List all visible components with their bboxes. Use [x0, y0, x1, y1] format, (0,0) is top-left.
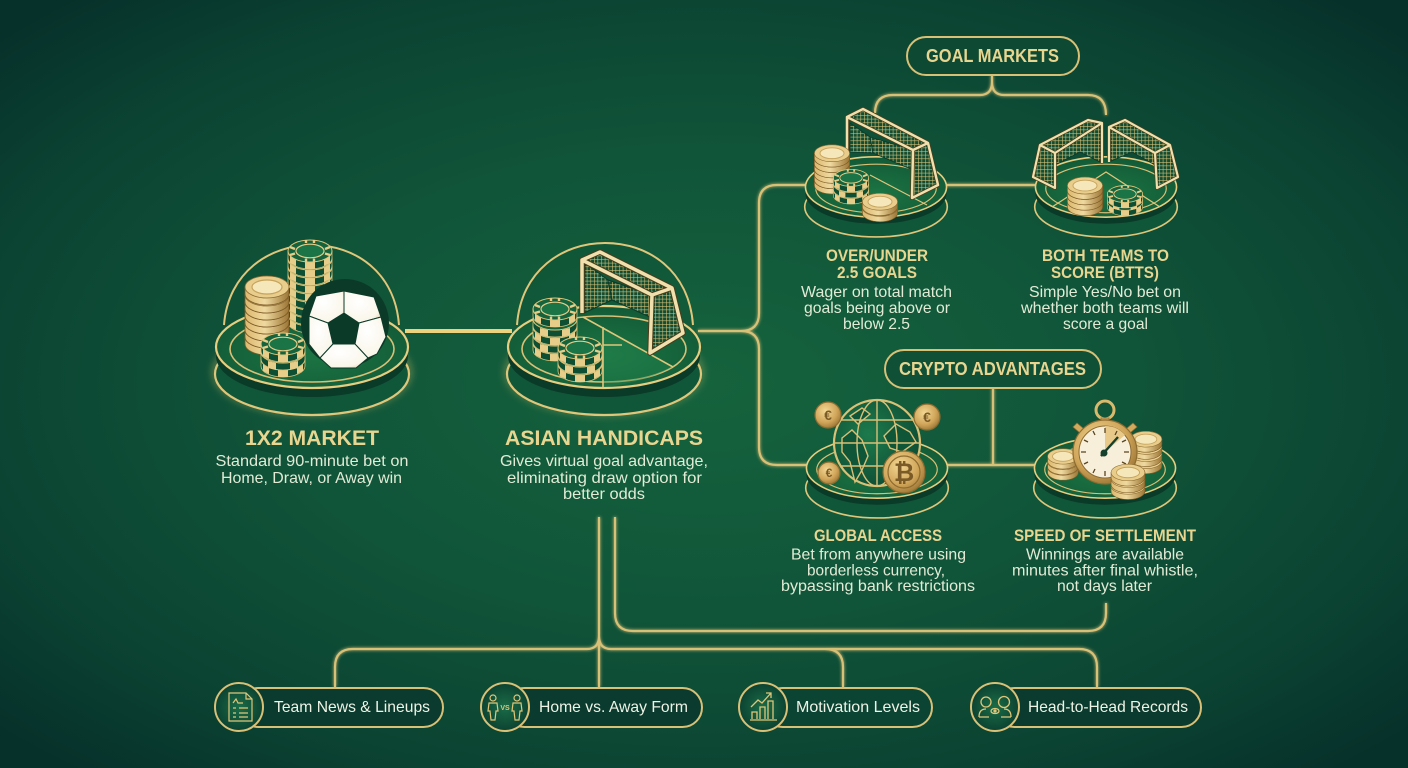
icon: stopwatch with gold coins	[1034, 401, 1176, 518]
description: over/under 2.5 goals: goals being above or	[804, 300, 951, 317]
description: over/under 2.5 goals: below 2.5	[843, 316, 910, 333]
description: global access: borderless currency,	[807, 562, 945, 580]
panel: Asian handicaps	[500, 243, 708, 503]
icon: 1X2 platform with chips and football	[215, 240, 409, 415]
description: 1X2 market: Standard 90-minute bet on	[216, 453, 408, 470]
factor pill: team news and lineups	[215, 683, 443, 731]
description: speed of settlement: Winnings are available	[1026, 546, 1184, 564]
icon: globe with crypto coins: €	[826, 466, 833, 480]
heading: 1X2 market: 1X2 MARKET	[245, 427, 379, 450]
icon: rising bar chart	[750, 693, 777, 720]
icon: two heads with eye	[979, 696, 1011, 717]
description: speed of settlement: not days later	[1057, 578, 1153, 595]
heading: over/under 2.5 goals	[826, 247, 928, 282]
description: speed of settlement: minutes after final whistle,	[1012, 562, 1198, 580]
icon: over/under platform with goal and chips	[805, 109, 947, 237]
connector: crypto advantages tree	[946, 388, 1036, 465]
icon: handicap platform with chips and goal	[507, 243, 701, 415]
icon: two players versus	[488, 695, 522, 720]
description: 1X2 market	[216, 453, 408, 487]
heading: over/under 2.5 goals: OVER/UNDER	[826, 247, 928, 265]
description: Asian handicaps: eliminating draw option for	[507, 470, 703, 487]
panel: speed of settlement	[1012, 401, 1198, 595]
panel: both teams to score	[1020, 120, 1189, 333]
heading: both teams to score: SCORE (BTTS)	[1051, 264, 1159, 282]
description: both teams to score: whether both teams will	[1020, 300, 1189, 317]
heading: speed of settlement: SPEED OF SETTLEMENT	[1014, 527, 1196, 545]
connector: analysis factors tree	[335, 517, 1097, 687]
description: global access: bypassing bank restrictions	[781, 578, 975, 595]
panel: over/under 2.5 goals	[801, 109, 952, 333]
factor pill: head-to-head records: Head-to-Head Records	[1028, 699, 1188, 716]
label pill: crypto advantages: CRYPTO ADVANTAGES	[899, 359, 1086, 379]
factor pill: motivation levels: Motivation Levels	[796, 699, 920, 716]
icon: BTTS platform with two goals and chips	[1033, 120, 1178, 237]
heading: both teams to score	[1042, 247, 1169, 282]
description: both teams to score: score a goal	[1063, 316, 1148, 333]
icon: document	[229, 693, 252, 721]
description: 1X2 market: Home, Draw, or Away win	[221, 470, 402, 487]
label pill: goal markets	[907, 37, 1079, 75]
factor pill: team news and lineups: Team News & Lineups	[274, 699, 430, 716]
description: both teams to score	[1020, 284, 1189, 333]
heading: global access: GLOBAL ACCESS	[814, 527, 942, 545]
heading: both teams to score: BOTH TEAMS TO	[1042, 247, 1169, 265]
panel: 1X2 market	[215, 240, 409, 487]
description: global access: Bet from anywhere using	[791, 546, 966, 564]
connector: Asian Handicaps to right branches	[698, 185, 809, 465]
icon: two players versus: VS	[500, 705, 510, 712]
icon: globe with crypto coins: €	[923, 409, 931, 425]
description: Asian handicaps	[500, 453, 708, 503]
description: over/under 2.5 goals	[801, 284, 952, 333]
connector: goal markets tree	[875, 75, 1106, 185]
panel: global access	[781, 400, 975, 595]
connector: 1X2 to Asian Handicaps	[405, 328, 512, 334]
factor pill: head-to-head records	[971, 683, 1201, 731]
heading: Asian handicaps: ASIAN HANDICAPS	[505, 427, 703, 450]
factor pill: home vs away form: Home vs. Away Form	[539, 699, 688, 716]
description: over/under 2.5 goals: Wager on total match	[801, 284, 952, 301]
description: Asian handicaps: Gives virtual goal advantage,	[500, 453, 708, 470]
factor pill: motivation levels	[739, 683, 932, 731]
connector: lower loop to Speed of Settlement	[615, 517, 1106, 631]
description: both teams to score: Simple Yes/No bet on	[1029, 284, 1181, 301]
icon: globe with crypto coins: ₿	[894, 459, 914, 487]
heading: over/under 2.5 goals: 2.5 GOALS	[837, 264, 917, 282]
description: global access	[781, 546, 975, 595]
icon: globe with crypto coins	[806, 400, 948, 518]
description: Asian handicaps: better odds	[563, 486, 645, 503]
factor pill: home vs away form	[481, 683, 702, 731]
label pill: crypto advantages	[885, 350, 1101, 388]
description: speed of settlement	[1012, 546, 1198, 595]
label pill: goal markets: GOAL MARKETS	[926, 46, 1059, 66]
icon: globe with crypto coins: €	[824, 407, 832, 423]
